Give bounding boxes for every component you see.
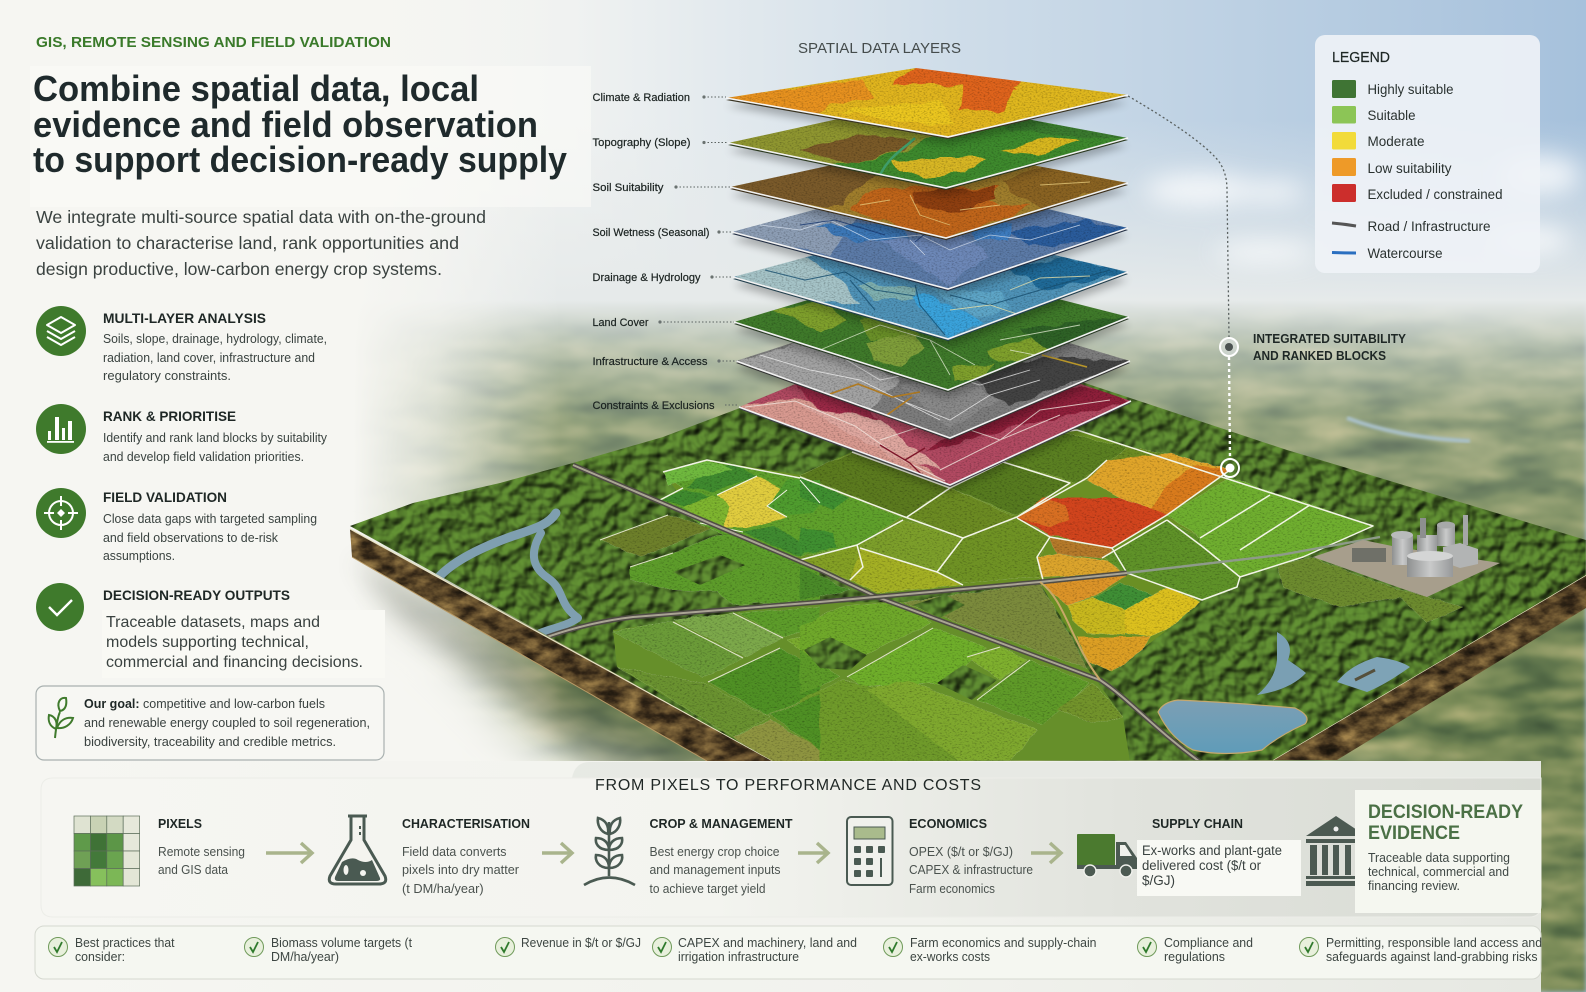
feature: field validation: assumptions.: [103, 549, 175, 563]
check item: best practices: consider:: [75, 950, 125, 964]
feature: decision-ready outputs: commercial and financing decisions.: [106, 654, 363, 671]
tree clumps: [673, 555, 997, 700]
connector: layer stack to integrated suitability: [1128, 96, 1239, 477]
icon: institution building: [1306, 816, 1355, 886]
step: crop and management: to achieve target yield: [650, 881, 766, 896]
icon: check mark: [36, 583, 84, 631]
left column eyebrow: GIS, REMOTE SENSING AND FIELD VALIDATION: [36, 34, 391, 51]
step: economics: ECONOMICS: [909, 816, 987, 831]
feature: decision-ready outputs: DECISION-READY OUTPUTS: [103, 587, 290, 603]
step: pixels: [74, 816, 245, 886]
legend: LEGEND: [1332, 49, 1390, 66]
parcel boundaries: [600, 430, 1373, 700]
feature: field validation: and field observations to de-risk: [103, 531, 279, 545]
legend: Highly suitable: [1368, 82, 1454, 97]
spatial data layers stack: [715, 60, 1150, 500]
decision-ready evidence box: [1355, 790, 1541, 913]
forest surface: [350, 382, 1586, 761]
icon: target: [36, 488, 86, 538]
step: characterisation: [329, 816, 530, 896]
check item: compliance: regulations: [1164, 950, 1225, 964]
legend: Watercourse: [1368, 246, 1442, 261]
feature: field validation: Close data gaps with targeted sampling: [103, 512, 317, 526]
title block: to support decision-ready supply: [33, 139, 567, 180]
feature: rank and prioritise: and develop field validation priorities.: [103, 450, 304, 464]
layer: topography: [728, 120, 1128, 198]
feature: multi-layer analysis: MULTI-LAYER ANALYSIS: [103, 310, 266, 326]
feature: multi-layer analysis: Soils, slope, drainage, hydrology, climate,: [103, 332, 327, 346]
feature: multi-layer analysis: regulatory constraints.: [103, 369, 231, 383]
check item: permitting: Permitting, responsible land access and: [1326, 936, 1542, 950]
step: crop and management: CROP & MANAGEMENT: [650, 816, 793, 831]
check item: biomass: [244, 936, 413, 964]
arrow: pixels to characterisation: [266, 843, 312, 863]
icon: stacked layers: [36, 306, 86, 356]
step: economics: Farm economics: [909, 881, 995, 896]
goal callout box: [36, 686, 384, 760]
arrow: characterisation to crop: [542, 843, 572, 863]
check item: best practices: [48, 936, 175, 964]
bio-energy plant: [1313, 515, 1500, 597]
step: supply chain: [1077, 816, 1301, 896]
step: crop and management: Best energy crop choice: [650, 844, 780, 859]
check item: farm economics: Farm economics and supply-chain: [910, 936, 1097, 950]
legend: Low suitability: [1368, 161, 1452, 176]
layer labels with leaders: Land Cover: [592, 317, 649, 329]
isometric land block with ranked fields: [340, 320, 1586, 790]
panel heading: FROM PIXELS TO PERFORMANCE AND COSTS: [595, 777, 981, 794]
block side walls: [350, 529, 1586, 761]
step: characterisation: Field data converts: [402, 844, 507, 859]
icon: pixel grid: [74, 816, 140, 886]
step: characterisation: pixels into dry matter: [402, 862, 520, 877]
step: supply chain: delivered cost ($/t or: [1142, 858, 1261, 873]
layer labels with leaders: Climate & Radiation: [592, 92, 690, 104]
layer labels with leaders: Infrastructure & Access: [592, 356, 708, 368]
layer labels with leaders: [592, 92, 739, 412]
pixels to performance panel: [41, 762, 1541, 917]
check item: biomass: DM/ha/year): [271, 950, 339, 964]
feature: field validation: [36, 488, 317, 563]
title block: [30, 66, 591, 207]
icon: flask: [329, 816, 386, 884]
feature: decision-ready outputs: [36, 583, 385, 678]
callout: integrated suitability: INTEGRATED SUITABILITY: [1253, 332, 1407, 346]
check item: revenue: [496, 936, 641, 956]
layer: soil wetness: [732, 209, 1128, 300]
check item: permitting: [1300, 936, 1542, 964]
check item: best practices: Best practices that: [75, 936, 175, 950]
block shadow: [352, 557, 770, 790]
feature: field validation: FIELD VALIDATION: [103, 489, 227, 505]
step: supply chain: $/GJ): [1142, 873, 1175, 888]
check item: biomass: Biomass volume targets (t: [271, 936, 413, 950]
intro paragraph: [36, 207, 486, 279]
title block: Combine spatial data, local: [33, 68, 479, 109]
bottom page wash: [0, 761, 1541, 992]
layer labels with leaders: Constraints & Exclusions: [592, 400, 715, 412]
farmland parcels: [600, 400, 1463, 762]
feature: decision-ready outputs: Traceable datasets, maps and: [106, 614, 320, 631]
goal callout box: Our goal: competitive and low-carbon fuels: [84, 697, 325, 711]
callout: integrated suitability: [1253, 332, 1407, 363]
farmland ground under parcels: [613, 429, 1252, 761]
checklist strip: [35, 926, 1542, 979]
decision-ready evidence box: financing review.: [1368, 878, 1460, 893]
intro paragraph: design productive, low-carbon energy crop systems.: [36, 259, 442, 279]
layer labels with leaders: Soil Wetness (Seasonal): [592, 227, 710, 239]
layer labels with leaders: Topography (Slope): [592, 137, 690, 149]
step: economics: [847, 816, 1033, 896]
step: economics: OPEX ($/t or $/GJ): [909, 844, 1013, 859]
legend: [1315, 35, 1540, 273]
rivers and ponds: [438, 513, 1410, 754]
heading: spatial data layers: SPATIAL DATA LAYERS: [798, 41, 961, 57]
step: supply chain: Ex-works and plant-gate: [1142, 843, 1282, 858]
feature: rank and prioritise: [36, 404, 328, 464]
roads: [547, 465, 1380, 762]
feature: multi-layer analysis: radiation, land cover, infrastructure and: [103, 351, 315, 365]
feature: multi-layer analysis: [36, 306, 327, 383]
check item: capex: irrigation infrastructure: [678, 950, 799, 964]
check item: capex: CAPEX and machinery, land and: [678, 936, 857, 950]
step: characterisation: CHARACTERISATION: [402, 816, 530, 831]
layer: constraints and exclusions: [738, 384, 1132, 494]
goal callout box: biodiversity, traceability and credible metrics.: [84, 735, 336, 749]
check item: compliance: Compliance and: [1164, 936, 1253, 950]
step: supply chain: SUPPLY CHAIN: [1152, 816, 1243, 831]
legend: Road / Infrastructure: [1368, 219, 1490, 234]
check item: revenue: Revenue in $/t or $/GJ: [521, 936, 641, 950]
step: pixels: Remote sensing: [158, 844, 245, 859]
decision-ready evidence box: EVIDENCE: [1368, 823, 1460, 844]
decision-ready evidence box: Traceable data supporting: [1368, 850, 1510, 865]
check item: capex: [652, 936, 857, 964]
layer labels with leaders: Drainage & Hydrology: [592, 272, 701, 284]
legend: Suitable: [1368, 108, 1416, 123]
layer: drainage and hydrology: [733, 255, 1128, 350]
decision-ready evidence box: technical, commercial and: [1368, 864, 1509, 879]
check item: compliance: [1138, 936, 1253, 964]
legend: Moderate: [1368, 134, 1424, 149]
feature: decision-ready outputs: models supporting technical,: [106, 634, 309, 651]
layer: infrastructure and access: [736, 342, 1130, 448]
callout: integrated suitability: AND RANKED BLOCKS: [1253, 349, 1386, 363]
step: crop and management: [584, 816, 793, 896]
layer: climate and radiation: [726, 68, 1128, 148]
goal callout box: and renewable energy coupled to soil regeneration,: [84, 716, 370, 730]
layer labels with leaders: Soil Suitability: [592, 182, 664, 194]
legend: Excluded / constrained: [1368, 187, 1502, 202]
decision-ready evidence box: DECISION-READY: [1368, 802, 1523, 823]
layer: soil suitability: [730, 166, 1128, 249]
feature: rank and prioritise: Identify and rank land blocks by suitability: [103, 431, 328, 445]
ranked upper parcels: [662, 433, 1374, 671]
feature: rank and prioritise: RANK & PRIORITISE: [103, 408, 236, 424]
layer: land cover: [734, 300, 1129, 400]
arrow: crop to economics: [798, 843, 828, 863]
icon: plant: [584, 818, 635, 885]
check item: permitting: safeguards against land-grabbing risks: [1326, 950, 1538, 964]
icon: calculator: [847, 817, 892, 885]
icon: truck: [1077, 834, 1137, 877]
step: characterisation: (t DM/ha/year): [402, 881, 484, 896]
step: crop and management: and management inputs: [650, 862, 781, 877]
arrow: economics to supply chain: [1031, 843, 1061, 863]
title block: evidence and field observation: [33, 104, 538, 145]
step: economics: CAPEX & infrastructure: [909, 862, 1033, 877]
icon: leaf sprig: [49, 698, 73, 738]
check item: farm economics: [884, 936, 1097, 964]
intro paragraph: validation to characterise land, rank opportunities and: [36, 233, 459, 253]
icon: bar chart: [36, 404, 86, 454]
step: pixels: PIXELS: [158, 816, 202, 831]
step: pixels: and GIS data: [158, 862, 229, 877]
intro paragraph: We integrate multi-source spatial data with on-the-ground: [36, 207, 486, 227]
check item: farm economics: ex-works costs: [910, 950, 990, 964]
